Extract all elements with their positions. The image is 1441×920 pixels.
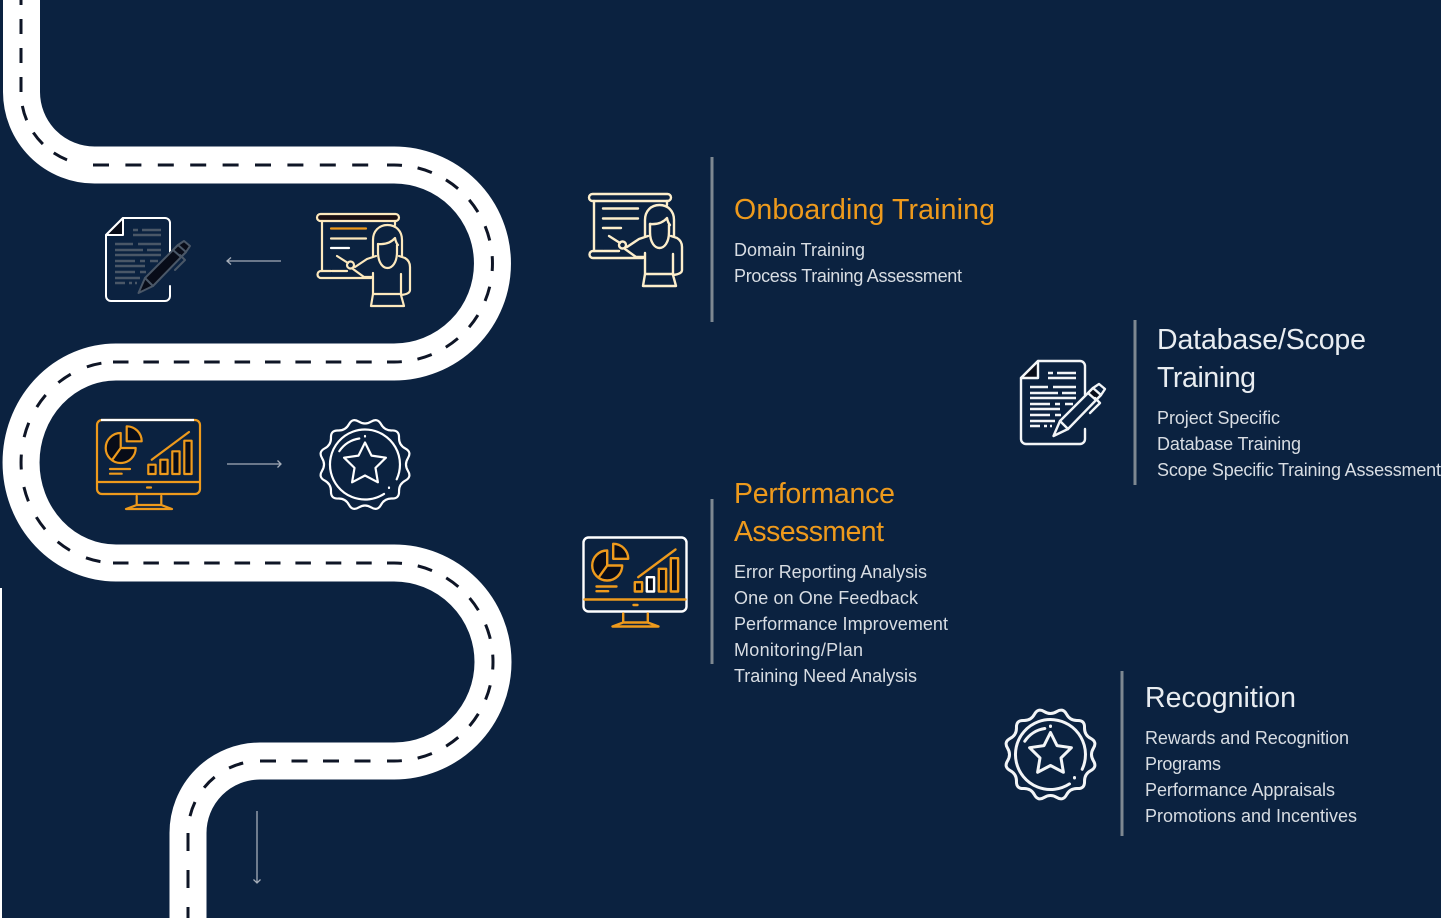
road icon: document	[106, 218, 190, 301]
left edge strip	[0, 588, 2, 920]
text block: One on One Feedback	[734, 588, 919, 608]
text block: Monitoring/Plan	[734, 640, 863, 660]
text block: Error Reporting Analysis	[734, 562, 927, 582]
icon: monitor	[584, 538, 686, 626]
text block: Performance Improvement	[734, 614, 948, 634]
divider	[710, 499, 714, 664]
arrow: right	[227, 460, 281, 468]
heading: Recognition	[1145, 682, 1296, 714]
heading: Onboarding Training	[734, 194, 995, 226]
text block: Database Training	[1157, 434, 1301, 454]
divider	[710, 157, 714, 322]
heading: Performance	[734, 478, 895, 510]
monitor top highlight	[101, 419, 194, 421]
panel: database scope training	[1021, 320, 1441, 485]
heading	[1157, 324, 1366, 394]
divider	[1134, 320, 1136, 485]
text block: Training Need Analysis	[734, 666, 917, 686]
panel: onboarding training	[589, 157, 995, 322]
arrow: left	[227, 258, 281, 264]
text block	[734, 562, 948, 686]
text block	[734, 240, 962, 286]
panel: performance assessment	[584, 478, 948, 686]
text block: Scope Specific Training Assessment	[1157, 460, 1441, 480]
text block: Programs	[1145, 754, 1221, 774]
arrow: down	[254, 811, 260, 883]
road icon: badge	[309, 408, 421, 521]
text block: Rewards and Recognition	[1145, 728, 1349, 748]
heading: Training	[1157, 362, 1256, 394]
text block: Promotions and Incentives	[1145, 806, 1357, 826]
icon: badge	[994, 698, 1107, 811]
heading	[734, 478, 895, 548]
text block: Domain Training	[734, 240, 865, 260]
bottom edge strip	[0, 918, 1441, 920]
icon: document with pen	[1021, 361, 1105, 444]
text block: Performance Appraisals	[1145, 780, 1335, 800]
text block: Process Training Assessment	[734, 266, 962, 286]
icon: presenter	[589, 194, 682, 286]
heading: Assessment	[734, 516, 884, 548]
heading: Database/Scope	[1157, 324, 1366, 356]
winding road	[21, 0, 493, 920]
text block	[1145, 728, 1357, 826]
divider	[1120, 671, 1124, 836]
text block	[1157, 408, 1441, 480]
road icon: presenter	[317, 214, 410, 306]
panel: recognition	[994, 671, 1357, 836]
road icon: monitor	[97, 420, 200, 509]
text block: Project Specific	[1157, 408, 1280, 428]
